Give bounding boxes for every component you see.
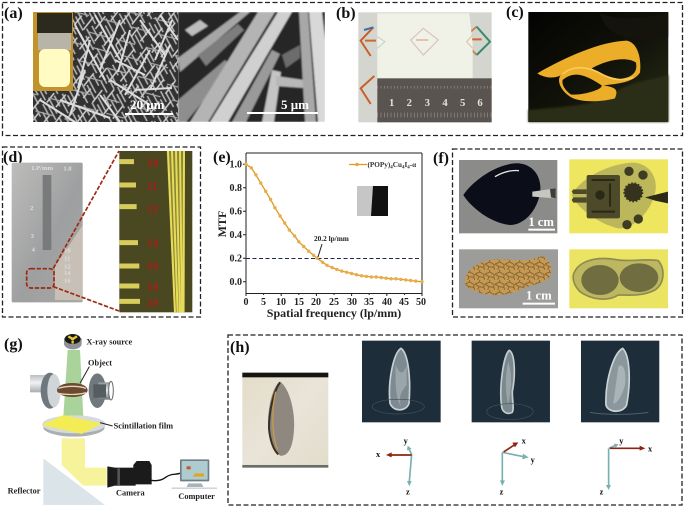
panel c: bent luminescent film xyxy=(528,12,668,122)
data curve xyxy=(246,164,422,282)
annotation xyxy=(314,234,349,257)
yellow band xyxy=(537,41,640,101)
seed object xyxy=(57,383,88,397)
axes triad 1 xyxy=(376,437,412,496)
axes xyxy=(246,153,422,294)
spoon photo xyxy=(459,160,557,233)
x tick labels: 40 xyxy=(382,297,392,308)
plate numbers xyxy=(30,165,72,284)
panel g: X-ray imaging setup schematic xyxy=(8,334,217,505)
axes triad 1: y xyxy=(404,437,409,446)
panel h frame xyxy=(228,335,682,505)
red numbers: 20 xyxy=(147,296,159,310)
SEM low magnification xyxy=(33,12,178,122)
threshold line xyxy=(246,258,422,260)
test plate xyxy=(12,163,83,302)
x tick labels: 15 xyxy=(294,297,304,308)
axes triad 2: z xyxy=(500,487,504,496)
panel label d: (d) xyxy=(3,149,23,166)
magnified image xyxy=(119,151,192,312)
x tick labels: 30 xyxy=(347,297,357,308)
red numbers: 10 xyxy=(147,156,159,170)
reflector xyxy=(43,458,105,505)
plate numbers: 1.8 xyxy=(63,166,72,173)
3D view 1 xyxy=(362,341,441,422)
computer xyxy=(172,459,217,489)
y tick labels: 0.2 xyxy=(230,254,242,264)
seed photo xyxy=(242,373,328,468)
x tick labels: 0 xyxy=(244,297,248,308)
red numbers: 16 xyxy=(147,258,159,272)
visible light path xyxy=(62,438,107,486)
plate numbers: 16 xyxy=(64,277,71,284)
ruler numbers: 3 xyxy=(425,98,430,109)
panel d frame xyxy=(2,147,200,317)
ruler numbers: 6 xyxy=(477,98,483,109)
red numbers: 18 xyxy=(147,280,159,294)
panel label h: (h) xyxy=(230,339,250,356)
x tick labels: 45 xyxy=(399,297,409,308)
red numbers: 12 xyxy=(147,202,159,216)
x tick labels: 5 xyxy=(261,297,266,308)
x tick labels: 25 xyxy=(329,297,339,308)
spoon photo: 1 cm xyxy=(528,215,554,229)
film pointer xyxy=(100,423,113,426)
plate numbers: 11 xyxy=(64,256,70,263)
panel a: SEM images and vial xyxy=(33,12,325,122)
legend: 4 xyxy=(402,166,405,170)
axes triad 1: z xyxy=(406,487,410,496)
ruler numbers xyxy=(389,98,483,109)
y tick labels: 0.6 xyxy=(230,206,242,218)
scale bar 5 um xyxy=(247,100,318,114)
peanut X-ray xyxy=(569,249,668,308)
ruler numbers: 5 xyxy=(460,98,465,109)
panel label f: (f) xyxy=(433,150,449,167)
y tick labels xyxy=(230,160,242,288)
x tick labels: 10 xyxy=(276,297,286,308)
peanut photo: 1 cm xyxy=(526,288,552,302)
axes triad 3 xyxy=(600,437,653,496)
plate numbers: 4 xyxy=(32,247,36,254)
line pairs xyxy=(167,151,185,312)
plate numbers: 14 xyxy=(64,270,71,277)
panel b: flexible film over patterned paper with ruler xyxy=(358,12,492,122)
red numbers: 14 xyxy=(147,236,159,250)
red numbers xyxy=(147,156,159,310)
ruler numbers: 1 xyxy=(389,98,394,109)
panel label b: (b) xyxy=(336,5,356,22)
panel label c: (c) xyxy=(506,4,524,21)
film xyxy=(377,13,473,80)
ruler xyxy=(377,78,492,122)
plate numbers: 2 xyxy=(30,205,34,212)
3D view 3 xyxy=(581,341,659,422)
panel f: photographs and X-ray images xyxy=(459,159,668,308)
red numbers: 11 xyxy=(147,179,158,193)
legend: 4 xyxy=(407,166,410,170)
axes triad 3: z xyxy=(600,487,604,496)
setup labels: Reflector xyxy=(8,486,41,495)
y tick labels: 1.0 xyxy=(230,160,242,170)
plate numbers: 3 xyxy=(31,233,35,240)
y axis title: MTF xyxy=(215,211,229,237)
x tick labels xyxy=(244,297,426,308)
plate numbers: 10 xyxy=(64,248,71,255)
ruler numbers: 4 xyxy=(442,98,448,109)
panel: top row frame xyxy=(2,2,682,136)
zoom box xyxy=(27,269,54,288)
plate numbers: LP/mm xyxy=(32,165,54,172)
axes triad 2: y xyxy=(531,455,536,464)
plate numbers: 12 xyxy=(64,263,71,270)
axes triad 3: x xyxy=(648,445,653,454)
tick marks xyxy=(119,162,140,301)
chart e: MTF curve xyxy=(215,153,426,320)
y tick labels: 0.8 xyxy=(230,183,242,194)
legend: I xyxy=(404,161,407,169)
legend: -α xyxy=(410,161,416,169)
legend xyxy=(349,161,416,170)
y tick labels: 0.0 xyxy=(230,277,242,288)
peanut photo xyxy=(459,249,558,308)
setup labels: Object xyxy=(88,359,112,368)
x axis title: Spatial frequency (lp/mm) xyxy=(267,306,401,320)
scale bar 20 um: 20 μm xyxy=(130,97,165,112)
legend: 4 xyxy=(390,166,393,170)
printed diamonds under the film xyxy=(361,27,490,104)
annotation: 20.2 lp/mm xyxy=(314,234,349,243)
ruler numbers: 2 xyxy=(407,98,412,109)
3D view 2 xyxy=(472,341,550,422)
right stage xyxy=(89,373,113,408)
setup labels: Camera xyxy=(116,488,145,497)
panel label a: (a) xyxy=(4,5,23,22)
setup labels: Computer xyxy=(178,492,215,501)
x tick labels: 50 xyxy=(416,297,426,308)
panel label e: (e) xyxy=(213,149,231,166)
x tick labels: 20 xyxy=(311,297,321,308)
object pointer xyxy=(80,367,89,383)
setup labels: X-ray source xyxy=(86,338,132,347)
panel label g: (g) xyxy=(4,336,23,353)
faint diamonds through the film xyxy=(377,28,473,55)
axes triad 3: y xyxy=(619,437,624,446)
x-ray source xyxy=(64,334,82,349)
axes triad 2 xyxy=(500,437,536,496)
cable xyxy=(151,473,180,481)
camera xyxy=(107,461,152,488)
scale bar 5 um: 5 μm xyxy=(281,97,309,112)
axes triad 1: x xyxy=(376,450,381,459)
spoon X-ray xyxy=(569,159,668,233)
panel h: seed photo, reconstructions and axes xyxy=(242,341,659,496)
x tick labels: 35 xyxy=(364,297,374,308)
zoom lines xyxy=(53,151,119,311)
legend: (POPy) xyxy=(368,161,390,169)
y tick labels: 0.4 xyxy=(230,230,242,241)
vial xyxy=(33,12,73,91)
panel f frame xyxy=(452,149,682,317)
x-ray beam xyxy=(63,350,83,417)
SEM high magnification xyxy=(178,12,325,122)
setup labels: Scintillation film xyxy=(114,422,173,431)
left stage xyxy=(30,373,61,409)
inset edge image xyxy=(357,186,388,216)
legend: Cu xyxy=(393,161,402,169)
axes triad 2: x xyxy=(522,437,527,446)
setup labels xyxy=(8,338,215,501)
scale bar 20 um xyxy=(125,100,173,115)
scintillation film xyxy=(42,415,106,437)
panel d: resolution plate and magnified view xyxy=(12,151,192,312)
